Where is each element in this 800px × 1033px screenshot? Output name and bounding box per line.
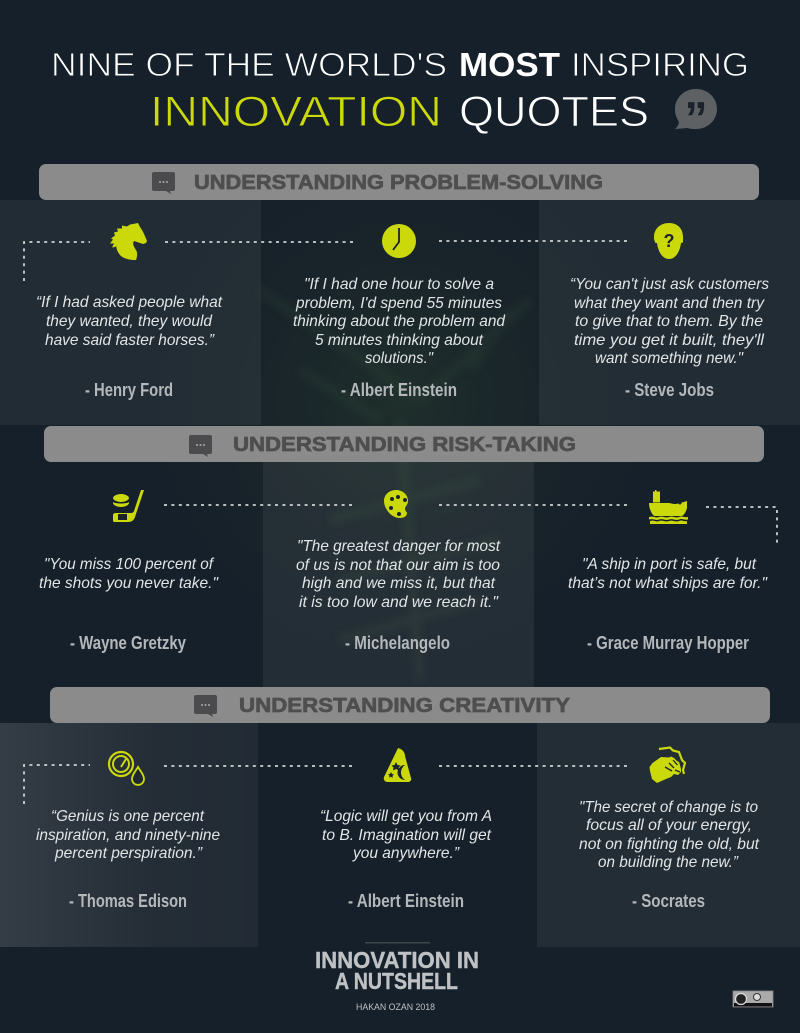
- quote: Steve Jobs: - Steve Jobs: [625, 380, 714, 400]
- quote: Grace Murray Hopper: - Grace Murray Hopper: [587, 633, 749, 653]
- quote: Socrates: focus all of your energy,: [586, 817, 752, 834]
- banner: understanding problem-solving: [39, 164, 759, 200]
- quote: Grace Murray Hopper: "A ship in port is safe, but: [582, 556, 757, 573]
- icon: hockey stick and puck: [113, 490, 144, 522]
- footer: brand: INNOVATION IN: [315, 947, 479, 973]
- quote: Henry Ford: have said faster horses.”: [45, 332, 215, 349]
- quote: Socrates: not on fighting the old, but: [579, 836, 760, 853]
- quote: Henry Ford: [36, 294, 223, 400]
- footer: brand: HAKAN OZAN 2018: [356, 1002, 435, 1012]
- quote: Steve Jobs: time you get it built, they'll: [574, 332, 764, 349]
- quote: Thomas Edison: “Genius is one percent: [51, 808, 205, 825]
- quote: Albert Einstein, logic: - Albert Einstein: [348, 891, 464, 911]
- quote: Albert Einstein, one hour: - Albert Einstein: [341, 380, 457, 400]
- title: [51, 46, 749, 136]
- quote: Grace Murray Hopper: that’s not what ships are for.": [568, 575, 768, 592]
- quote: Socrates: on building the new.”: [598, 854, 739, 871]
- quote: Thomas Edison: [36, 808, 220, 911]
- quote: Wayne Gretzky: "You miss 100 percent of: [44, 556, 214, 573]
- icon: creative commons badge: [733, 991, 773, 1007]
- banner: understanding problem-solving: UNDERSTANDING PROBLEM-SOLVING: [194, 172, 603, 194]
- banner: understanding creativity: [50, 687, 770, 723]
- quote: Albert Einstein, logic: you anywhere.”: [352, 845, 460, 862]
- quote: Thomas Edison: percent perspiration.”: [54, 845, 203, 862]
- title: MOST: [459, 46, 560, 83]
- quote: Albert Einstein, logic: to B. Imagination will get: [322, 827, 492, 844]
- connector: creativity dashed lines: [24, 765, 630, 804]
- title: NINE OF THE WORLD'S: [51, 46, 447, 83]
- quote: Socrates: "The secret of change is to: [579, 799, 758, 816]
- banner: understanding risk-taking: UNDERSTANDING RISK-TAKING: [233, 434, 576, 456]
- section panels: creativity row: [0, 723, 800, 947]
- quote: Michelangelo: high and we miss it, but that: [302, 575, 496, 592]
- quote: Albert Einstein, one hour: 5 minutes thinking about: [315, 332, 484, 349]
- quote: Henry Ford: “If I had asked people what: [36, 294, 223, 311]
- quote: Steve Jobs: what they want and then try: [574, 295, 765, 312]
- quote: Albert Einstein, one hour: thinking about the problem and: [293, 313, 506, 330]
- icon: head with question mark: [654, 223, 683, 259]
- quote: Steve Jobs: [570, 276, 769, 400]
- quote: Wayne Gretzky: - Wayne Gretzky: [70, 633, 186, 653]
- title: INNOVATION: [150, 88, 442, 136]
- icon: quote bubble: [675, 89, 717, 144]
- quote: Michelangelo: of us is not that our aim is too: [296, 557, 500, 574]
- quote: Steve Jobs: want something new.": [595, 350, 744, 367]
- quote: Socrates: - Socrates: [632, 891, 705, 911]
- quote: Michelangelo: it is too low and we reach it.": [299, 594, 499, 611]
- title: QUOTES: [459, 88, 649, 136]
- section panels: problem-solving row: [0, 200, 800, 425]
- quote: Michelangelo: "The greatest danger for most: [297, 538, 501, 555]
- quote: Steve Jobs: “You can't just ask customers: [570, 276, 769, 293]
- quote: Thomas Edison: - Thomas Edison: [69, 891, 187, 911]
- banner: understanding risk-taking: [44, 426, 764, 462]
- icon: horse: [110, 223, 147, 260]
- quote: Socrates: [579, 799, 760, 911]
- icon: palette: [384, 490, 408, 518]
- footer: brand: [315, 942, 479, 1012]
- title: INSPIRING: [571, 46, 749, 83]
- banner: understanding creativity: UNDERSTANDING CREATIVITY: [239, 695, 571, 717]
- quote: Albert Einstein, one hour: "If I had one hour to solve a: [304, 276, 494, 293]
- quote: Wayne Gretzky: the shots you never take.": [39, 575, 219, 592]
- icon: clock: [382, 224, 416, 258]
- quote: Albert Einstein, logic: [320, 808, 492, 911]
- quote: Wayne Gretzky: [39, 556, 219, 653]
- connector: problem-solving dashed lines: [24, 241, 630, 281]
- footer: brand: A NUTSHELL: [335, 968, 458, 994]
- quote: Albert Einstein, one hour: problem, I'd spend 55 minutes: [295, 295, 502, 312]
- icon: gauge with drop: [109, 752, 144, 785]
- quote: Albert Einstein, one hour: solutions.": [365, 350, 434, 367]
- quote: Henry Ford: - Henry Ford: [85, 380, 173, 400]
- quote: Henry Ford: they wanted, they would: [46, 313, 213, 330]
- quote: Michelangelo: - Michelangelo: [345, 633, 450, 653]
- icon: fist: [650, 748, 685, 783]
- icon: quote bubble: ”: [684, 92, 708, 144]
- icon: head with question mark: ?: [664, 231, 674, 251]
- section panels: risk-taking row: [263, 462, 534, 687]
- quote: Albert Einstein, one hour: [293, 276, 506, 400]
- quote: Grace Murray Hopper: [568, 556, 768, 653]
- quote: Albert Einstein, logic: “Logic will get you from A: [320, 808, 492, 825]
- connector: risk-taking dashed lines: [164, 505, 777, 547]
- icon: wizard hat: [384, 748, 411, 782]
- icon: ship: [649, 490, 688, 524]
- quote: Thomas Edison: inspiration, and ninety-nine: [36, 827, 220, 844]
- quote: Steve Jobs: to give that to them. By the: [575, 313, 763, 330]
- quote: Michelangelo: [296, 538, 501, 653]
